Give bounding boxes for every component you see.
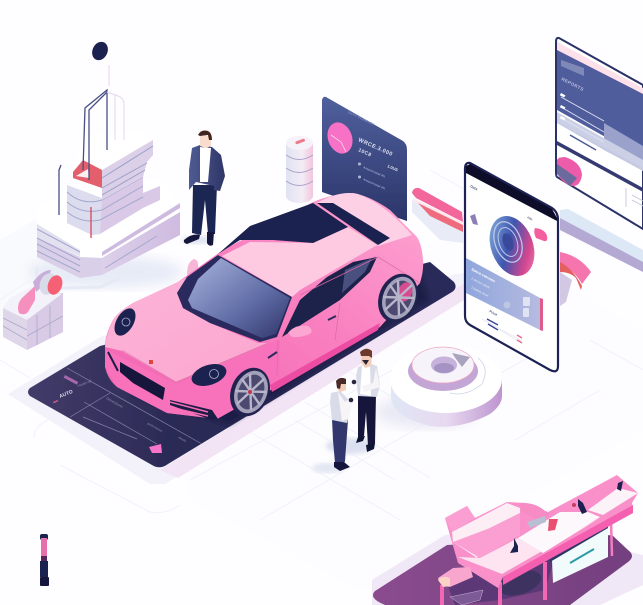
floor tiles <box>0 170 643 590</box>
phone: Status overview <box>471 267 496 284</box>
desk main body <box>445 475 638 588</box>
base top face <box>37 180 180 253</box>
card text <box>348 110 399 191</box>
phone notch band <box>466 164 557 221</box>
shoes <box>184 232 214 246</box>
platform halo <box>8 272 478 484</box>
disc chart <box>482 210 542 282</box>
building shadow <box>27 256 183 288</box>
card text: WRCE.3.000 <box>357 137 394 158</box>
rear wheel <box>371 268 425 328</box>
pink square <box>149 444 162 453</box>
shorter man <box>330 378 353 471</box>
phone <box>465 163 558 371</box>
jacket <box>189 145 225 191</box>
badge <box>149 360 153 364</box>
two men <box>312 349 380 473</box>
right headlight <box>189 360 229 390</box>
windshield <box>177 255 292 342</box>
ring platform <box>375 345 502 428</box>
left headlight <box>110 305 140 339</box>
roof pink <box>222 227 377 297</box>
red tool <box>548 519 558 531</box>
card text: 10C8 <box>357 147 372 159</box>
platform labels: model ref <box>77 379 92 388</box>
pink badge <box>534 228 547 241</box>
side skirt <box>270 323 380 392</box>
platform labels: Dimensions <box>106 396 124 409</box>
platform labels <box>53 368 202 453</box>
front wheel <box>223 362 277 422</box>
platform labels: details <box>178 435 187 443</box>
desk mat <box>373 535 632 605</box>
platform labels: AUTO <box>59 389 74 400</box>
head <box>200 136 211 148</box>
pie <box>323 119 357 157</box>
car shadow <box>130 270 430 425</box>
monitor pie <box>557 157 582 186</box>
lower pale table <box>458 518 600 574</box>
wrapped stool <box>438 567 473 587</box>
cylinder <box>286 136 313 203</box>
under desk shadow <box>445 540 560 605</box>
base lower slab <box>37 212 180 278</box>
floating dark disc <box>89 39 111 63</box>
platform labels: performance <box>147 421 163 433</box>
card text: 1.0US <box>387 163 399 173</box>
door lines <box>277 257 420 375</box>
businessman <box>182 130 225 246</box>
drawer unit <box>552 527 608 583</box>
lower intake <box>170 400 218 420</box>
workbench scene <box>372 475 643 605</box>
stacked block <box>67 177 160 235</box>
small tube figure <box>40 534 49 586</box>
standing man <box>352 349 380 452</box>
coin box <box>3 270 65 350</box>
phone small icon <box>470 214 478 225</box>
red arch behind phone <box>560 252 591 306</box>
monitor <box>556 38 643 229</box>
phone lower rows: Price <box>489 309 498 317</box>
base upper side <box>37 224 80 256</box>
phone: 2 battery level <box>471 285 489 298</box>
top sheet <box>518 512 600 553</box>
shelf details <box>450 590 483 605</box>
phone: 1 service check <box>471 276 491 290</box>
upper block <box>102 140 153 200</box>
dark platform under car <box>28 262 456 467</box>
card text: Amount total 4% <box>363 165 386 179</box>
monitor: REPORTS <box>561 76 585 92</box>
side window <box>282 257 377 337</box>
phone status text: Data <box>470 184 478 191</box>
trousers <box>192 185 217 235</box>
bench upper <box>445 506 475 532</box>
pink block behind phone <box>412 188 463 243</box>
clamps <box>510 538 518 553</box>
body outline <box>105 193 423 419</box>
sports car <box>105 193 430 425</box>
desk legs <box>442 562 545 605</box>
front fascia <box>105 340 280 419</box>
data card <box>322 97 407 221</box>
pipes <box>59 90 107 215</box>
red accent <box>73 160 102 188</box>
ring middle <box>408 351 478 391</box>
roof black <box>218 203 348 254</box>
card text: DATA SUMMARY <box>348 110 375 127</box>
side mirror <box>288 326 312 337</box>
hood <box>105 277 267 382</box>
rear deck <box>317 193 412 246</box>
grille <box>120 362 165 400</box>
phone: Info <box>527 215 533 222</box>
building diagram <box>27 39 183 288</box>
blue info band <box>466 258 542 331</box>
light bar under monitor <box>560 209 643 272</box>
mirror left <box>187 259 198 278</box>
card text: Amount total 4% <box>363 177 386 191</box>
halo under desk <box>372 525 643 605</box>
floor shadows <box>326 438 374 454</box>
